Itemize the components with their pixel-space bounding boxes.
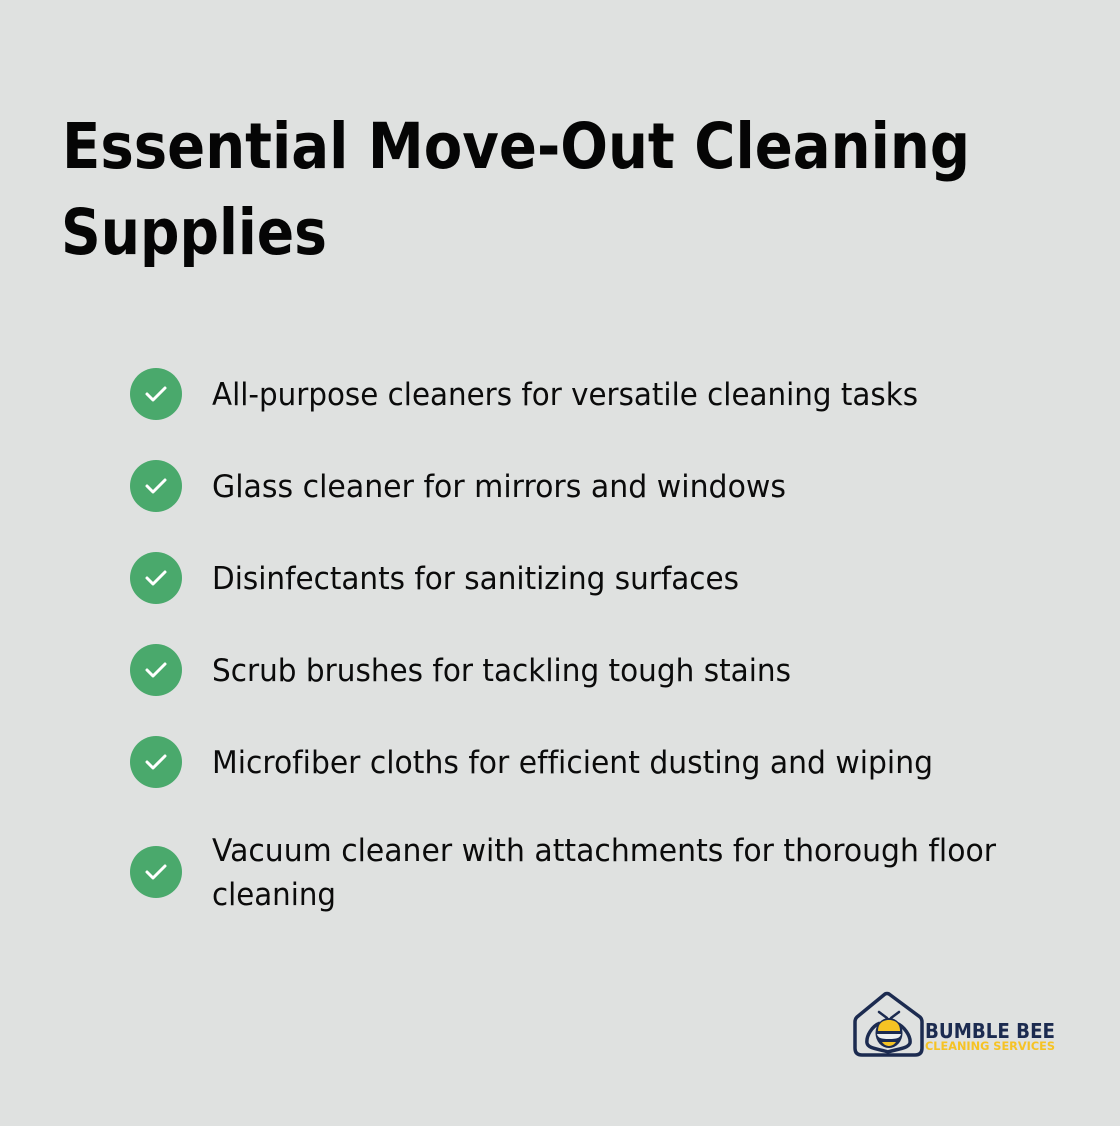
item: vacuum cleaner: Vacuum cleaner with attachments for thorough floor xyxy=(212,833,996,869)
checklist xyxy=(130,368,996,913)
icon: house with bee xyxy=(855,994,922,1055)
title: Supplies xyxy=(61,196,327,269)
item: disinfectants: Disinfectants for sanitizing surfaces xyxy=(212,561,739,597)
item: vacuum cleaner: cleaning xyxy=(212,877,336,913)
logo tagline: CLEANING SERVICES xyxy=(925,1039,1055,1053)
item: all-purpose cleaners xyxy=(130,368,918,420)
logo wordmark: BUMBLE BEE xyxy=(925,1019,1055,1043)
item: all-purpose cleaners: All-purpose cleaners for versatile cleaning tasks xyxy=(212,377,918,413)
item: glass cleaner xyxy=(130,460,786,512)
item: scrub brushes: Scrub brushes for tackling tough stains xyxy=(212,653,791,689)
item: vacuum cleaner xyxy=(130,833,996,913)
item: microfiber cloths: Microfiber cloths for efficient dusting and wiping xyxy=(212,745,933,781)
logo: Bumble Bee Cleaning Services xyxy=(855,994,1055,1055)
item: microfiber cloths xyxy=(130,736,933,788)
item: glass cleaner: Glass cleaner for mirrors and windows xyxy=(212,469,786,505)
title: Essential Move-Out Cleaning xyxy=(62,110,970,183)
title xyxy=(61,110,970,269)
item: scrub brushes xyxy=(130,644,791,696)
item: disinfectants xyxy=(130,552,739,604)
